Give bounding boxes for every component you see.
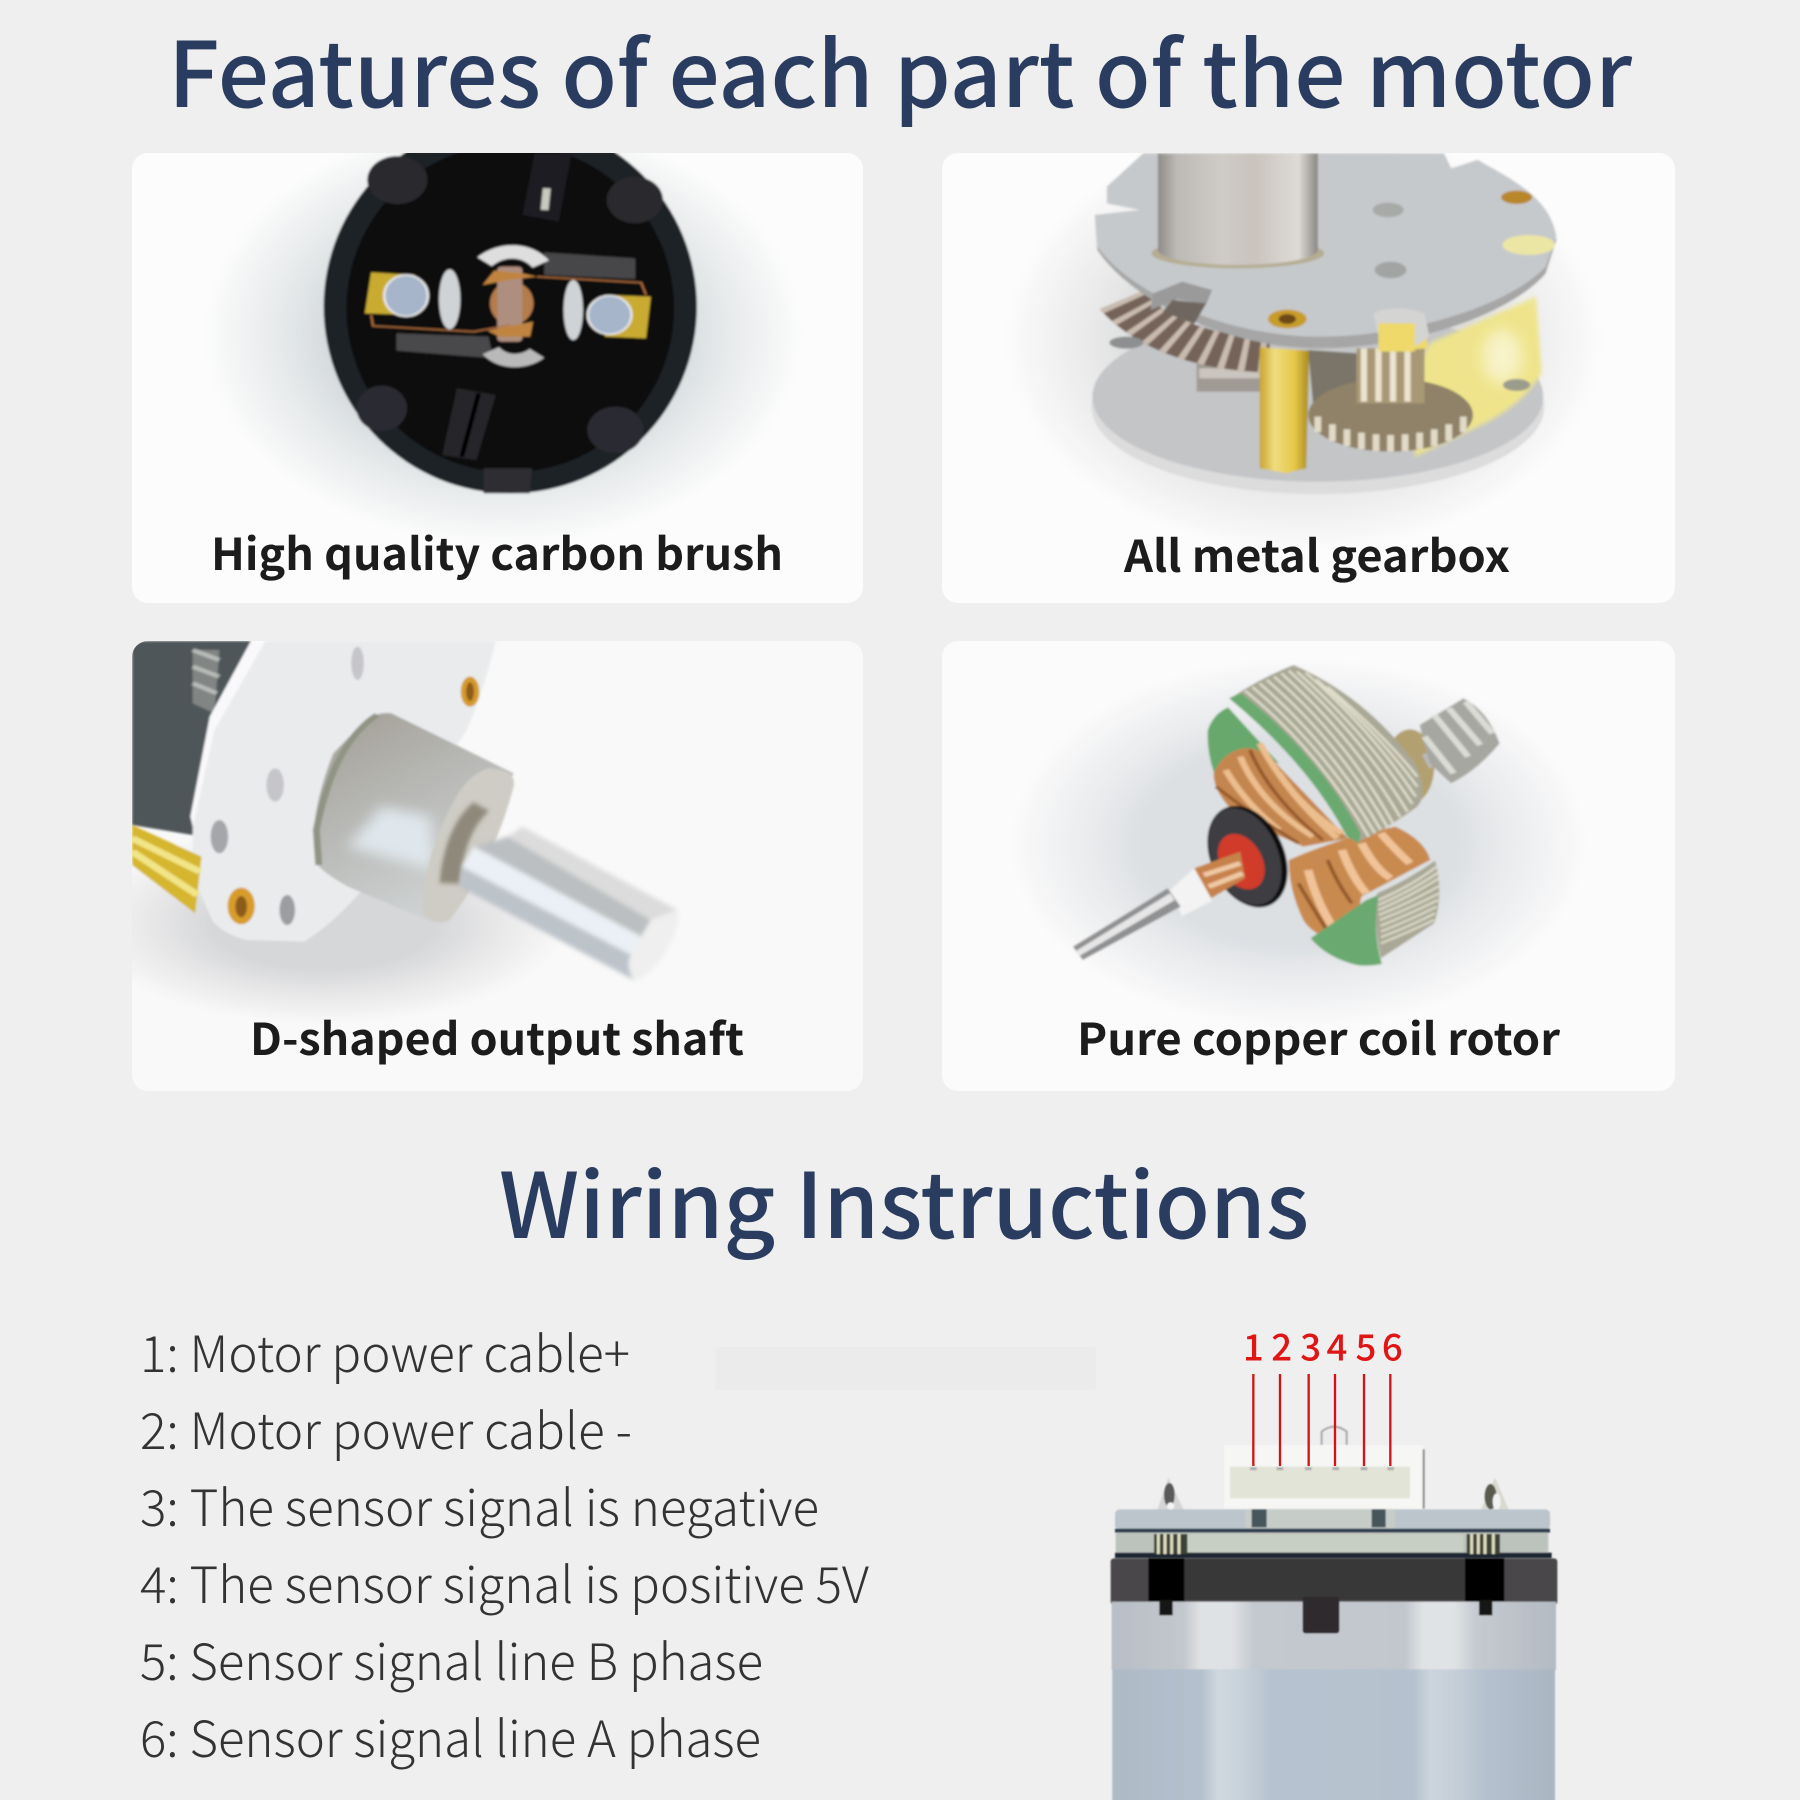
line 5: 5: Sensor signal line B phase	[140, 1623, 763, 1695]
caption: gearbox: All metal gearbox	[1123, 521, 1510, 585]
encoder plates	[1115, 1509, 1552, 1558]
photo: D-shaped output shaft	[132, 641, 677, 1010]
mounting spikes	[1157, 1478, 1509, 1510]
motor body	[1111, 1427, 1557, 1800]
photo: copper coil rotor	[1048, 664, 1550, 1004]
panel: output shaft	[81, 641, 863, 1091]
pin number 5: 5	[1356, 1318, 1376, 1372]
panel: gearbox	[942, 127, 1675, 603]
line 3: 3: The sensor signal is negative	[140, 1469, 819, 1541]
pin number 4: 4	[1327, 1318, 1347, 1372]
caption: output shaft: D-shaped output shaft	[250, 1004, 744, 1068]
pin number 3: 3	[1300, 1318, 1321, 1372]
leader lines	[1253, 1374, 1390, 1466]
photo: metal gearbox	[1042, 153, 1564, 526]
pin number 1: 1	[1243, 1318, 1264, 1372]
panel: copper coil rotor	[942, 641, 1675, 1091]
heading: wiring instructions: Wiring Instructions	[499, 1134, 1309, 1264]
black end bell	[1111, 1558, 1557, 1605]
wiring list	[140, 1315, 869, 1772]
pin number 6: 6	[1382, 1318, 1403, 1372]
shaft bands	[459, 827, 678, 980]
line 6: 6: Sensor signal line A phase	[140, 1700, 761, 1772]
line 2: 2: Motor power cable -	[140, 1392, 632, 1464]
pin number 2: 2	[1271, 1318, 1292, 1372]
motor can	[1112, 1597, 1556, 1800]
connector	[1224, 1427, 1425, 1509]
caption: coil rotor: Pure copper coil rotor	[1077, 1004, 1561, 1068]
faint patch beside the list	[715, 1347, 1096, 1390]
line 1: 1: Motor power cable+	[140, 1315, 630, 1387]
line 4: 4: The sensor signal is positive 5V	[140, 1546, 869, 1618]
title: features: Features of each part of the motor	[168, 3, 1632, 133]
panel: carbon brush	[132, 120, 863, 603]
caption: carbon brush: High quality carbon brush	[211, 519, 783, 583]
photo: carbon brush end cap	[232, 153, 774, 526]
motor photo with pin numbers	[1111, 1318, 1557, 1800]
